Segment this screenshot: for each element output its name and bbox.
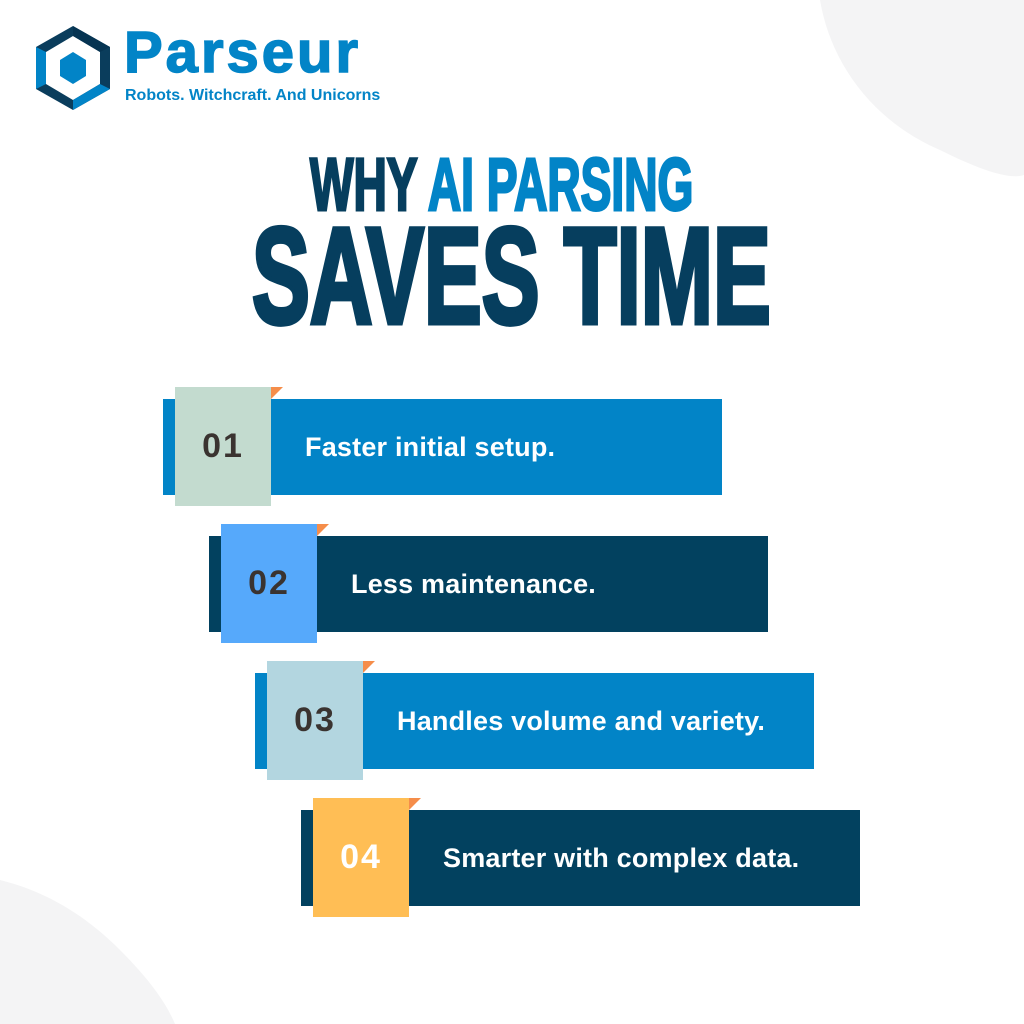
item 3: 03 — [294, 701, 336, 739]
item 1: 01 — [202, 427, 244, 465]
item 2: 02 — [248, 564, 290, 602]
wordmark: Parseur — [124, 20, 361, 85]
title: SAVES TIME — [252, 200, 771, 353]
logo — [36, 20, 380, 110]
item 2 — [209, 524, 768, 643]
item 4: 04 — [340, 838, 382, 876]
title: WHY AI PARSING — [310, 143, 693, 226]
item 3: Handles volume and variety. — [397, 706, 765, 736]
item 1 — [163, 387, 722, 506]
tagline: Robots. Witchcraft. And Unicorns — [125, 87, 380, 104]
item 1: Faster initial setup. — [305, 432, 555, 462]
item 2: Less maintenance. — [351, 569, 596, 599]
item 4: Smarter with complex data. — [443, 843, 799, 873]
item 4 — [301, 798, 860, 917]
item 3 — [255, 661, 814, 780]
icon: logo cube — [36, 26, 110, 110]
